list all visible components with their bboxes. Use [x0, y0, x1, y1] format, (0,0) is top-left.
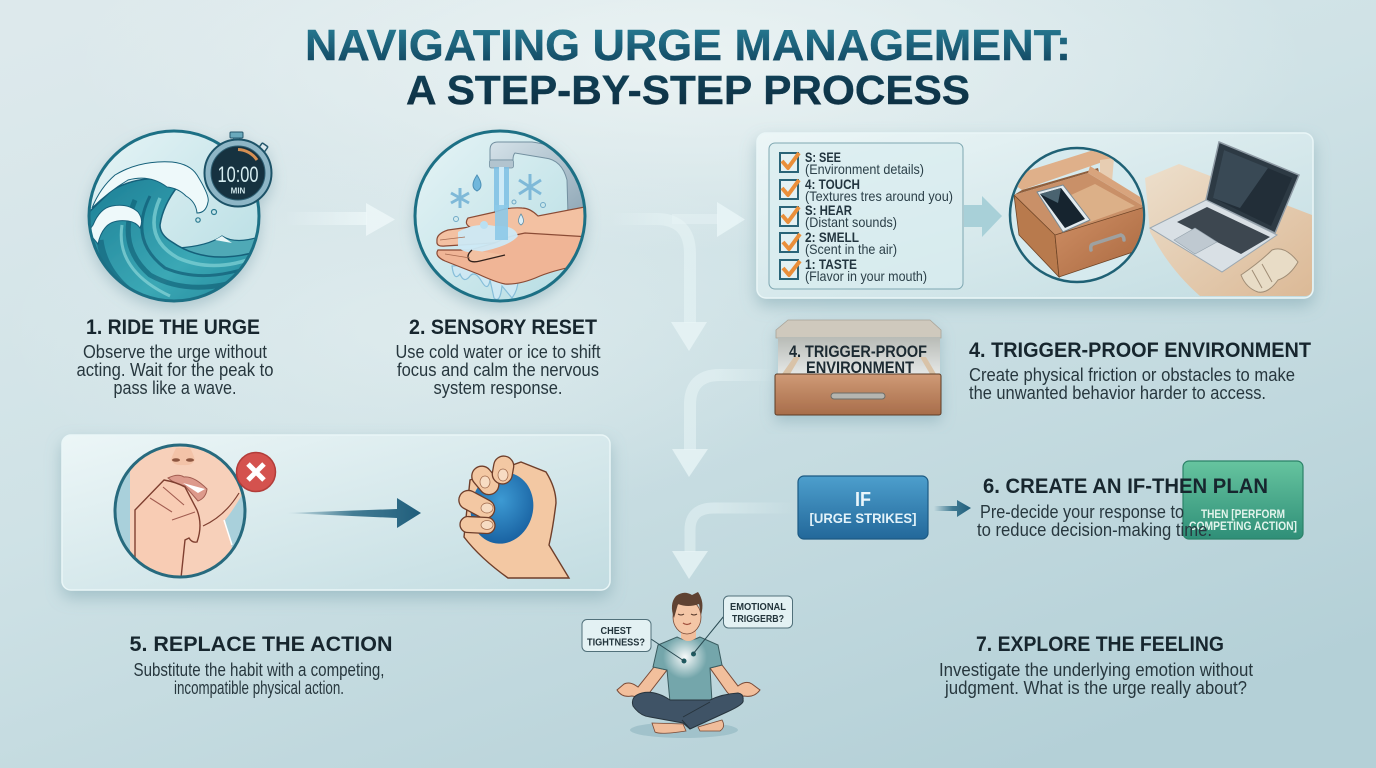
- panel: grounding checklist and drawer: [757, 133, 1313, 298]
- desk and laptop: [1145, 142, 1312, 296]
- callout: emotional trigger: TRIGGERB?: [732, 613, 784, 625]
- step 2 text: 2. SENSORY RESET: [409, 316, 597, 339]
- arrow: if to then: [934, 500, 971, 517]
- checklist: (Scent in the air): [805, 241, 897, 257]
- checklist: (Flavor in your mouth): [805, 268, 927, 284]
- step 5 text: [130, 633, 392, 698]
- step 2 text: system response.: [434, 378, 562, 398]
- arrow: step 4 to step 6: [672, 375, 775, 477]
- checklist: (Textures tres around you): [805, 188, 953, 204]
- step 1 text: acting. Wait for the peak to: [76, 360, 274, 380]
- arrow: checklist to drawer: [964, 196, 1002, 237]
- step 6 text: Pre-decide your response to: [980, 502, 1184, 522]
- step 1 text: pass like a wave.: [114, 378, 236, 398]
- step 5 text: Substitute the habit with a competing,: [134, 660, 384, 680]
- checklist: 1: TASTE: [805, 256, 857, 272]
- box: if urge strikes: IF: [855, 489, 871, 511]
- icon: labelled drawer: ENVIRONMENT: [806, 358, 915, 377]
- stopwatch: 10:00: [218, 162, 258, 187]
- step 2 text: focus and calm the nervous: [397, 360, 599, 380]
- checklist: (Distant sounds): [805, 214, 897, 230]
- step 1 text: [76, 316, 274, 398]
- step 6 text: to reduce decision-making time.: [977, 520, 1212, 540]
- step 1 text: Observe the urge without: [83, 342, 267, 362]
- step 2 text: Use cold water or ice to shift: [396, 342, 600, 362]
- checklist: [769, 143, 963, 289]
- icon: nail biting: [115, 440, 245, 580]
- stopwatch: [204, 132, 272, 206]
- step 5 text: 5. REPLACE THE ACTION: [130, 633, 392, 656]
- box: if urge strikes: [798, 476, 928, 539]
- checklist: S: HEAR: [805, 202, 852, 218]
- callout: chest tightness: CHEST: [600, 625, 632, 637]
- step 4 text: 4. TRIGGER-PROOF ENVIRONMENT: [969, 339, 1311, 362]
- callout: chest tightness: [582, 620, 651, 652]
- callout: emotional trigger: EMOTIONAL: [730, 601, 787, 613]
- step 1 text: 1. RIDE THE URGE: [86, 316, 260, 339]
- icon: meditating person: [582, 592, 792, 738]
- checklist: 2: SMELL: [805, 229, 859, 245]
- icon: red cross badge: [236, 452, 276, 492]
- step 7 text: judgment. What is the urge really about?: [944, 678, 1247, 698]
- step 4 text: Create physical friction or obstacles to make: [969, 365, 1295, 385]
- panel: replace the action: [62, 435, 610, 590]
- arrow: step 1 to step 2: [285, 203, 395, 236]
- step 4 text: [969, 339, 1311, 403]
- box: if urge strikes: [URGE STRIKES]: [810, 510, 916, 526]
- icon: hands under cold water: [414, 130, 590, 302]
- icon: phone in drawer: [1005, 148, 1145, 282]
- arrow: step 2 to step 3 and branch down: [610, 202, 745, 351]
- step 2 text: [396, 316, 600, 398]
- step 4 text: the unwanted behavior harder to access.: [969, 383, 1266, 403]
- stopwatch: MIN: [231, 186, 246, 196]
- box: then competing action: [1183, 461, 1303, 539]
- callout: emotional trigger: [724, 596, 792, 628]
- icon: hand squeezing stress ball: [456, 454, 569, 578]
- box: then competing action: COMPETING ACTION]: [1189, 519, 1297, 533]
- arrow: step 6 to step 7: [672, 508, 795, 579]
- step 6 text: 6. CREATE AN IF-THEN PLAN: [983, 475, 1268, 498]
- icon: labelled drawer: 4. TRIGGER-PROOF: [789, 342, 927, 361]
- step 7 text: 7. EXPLORE THE FEELING: [976, 633, 1224, 656]
- title: [305, 21, 1071, 113]
- step 5 text: incompatible physical action.: [174, 678, 344, 698]
- arrow: replace: [285, 498, 421, 528]
- icon: labelled drawer: [775, 320, 941, 415]
- checklist: (Environment details): [805, 161, 924, 177]
- step 7 text: Investigate the underlying emotion without: [939, 660, 1253, 680]
- box: then competing action: THEN [PERFORM: [1201, 507, 1285, 521]
- step 6 text: [977, 475, 1268, 540]
- step 7 text: [939, 633, 1253, 698]
- callout: chest tightness: TIGHTNESS?: [587, 636, 645, 648]
- title: A STEP-BY-STEP PROCESS: [406, 67, 970, 113]
- title: NAVIGATING URGE MANAGEMENT:: [305, 21, 1071, 70]
- icon: wave with stopwatch: [86, 130, 272, 310]
- checklist: 4: TOUCH: [805, 176, 860, 192]
- checklist: S: SEE: [805, 149, 841, 165]
